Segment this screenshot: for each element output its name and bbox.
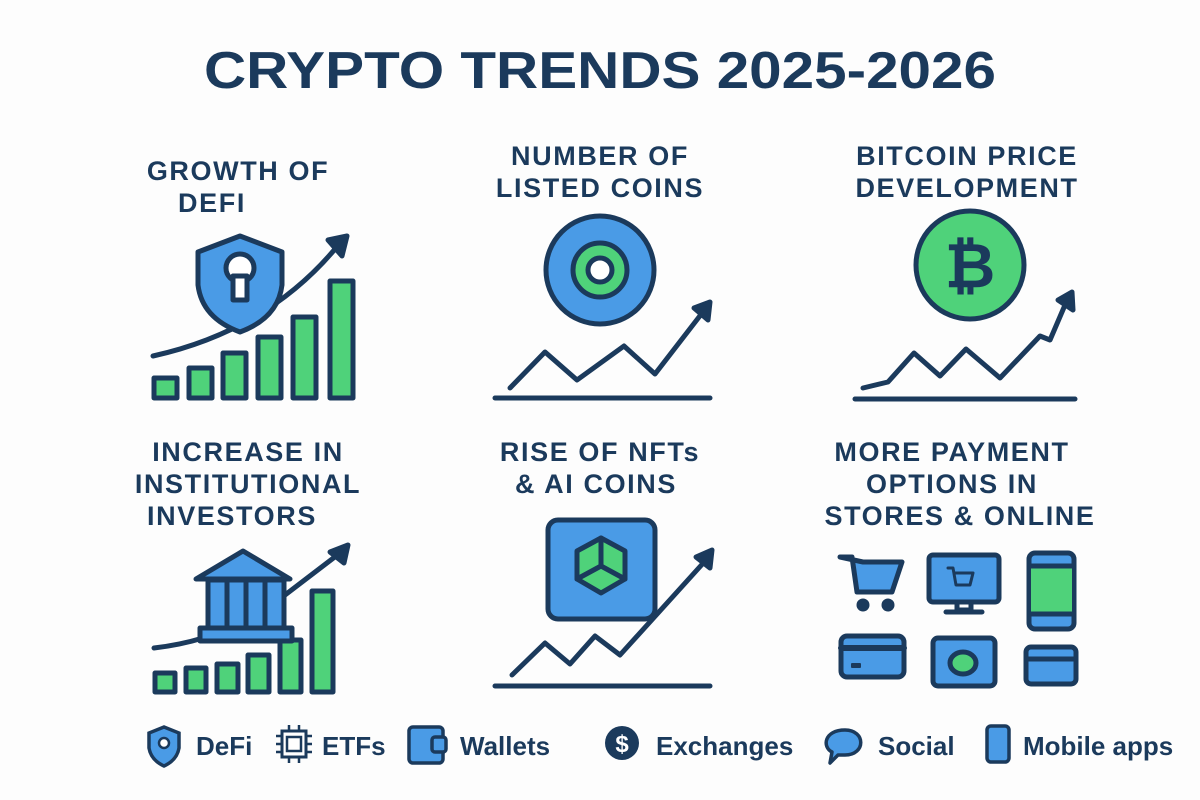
icon: monitor — [929, 555, 999, 612]
legend: mobile apps — [987, 726, 1173, 762]
heading: growth of defi: DEFI — [178, 188, 246, 218]
title: CRYPTO TRENDS 2025-2026 — [204, 42, 996, 100]
heading: payments: STORES & ONLINE — [824, 501, 1096, 531]
heading: bitcoin price — [855, 141, 1079, 203]
icon: card — [841, 636, 904, 677]
heading: nfts: RISE OF NFTs — [500, 437, 700, 467]
panel: payment options — [824, 437, 1096, 686]
heading: bitcoin price: DEVELOPMENT — [855, 173, 1079, 203]
legend: etfs: ETFs — [322, 731, 386, 761]
legend: wallets — [409, 727, 550, 763]
arrow: institutional trend — [154, 545, 348, 648]
arrow: defi trend — [153, 236, 347, 356]
legend: social: Social — [878, 731, 955, 761]
legend: defi: DeFi — [196, 731, 252, 761]
icon: bitcoin: ₿ — [945, 232, 995, 301]
legend: mobile apps: Mobile apps — [1023, 731, 1173, 761]
chart: institutional bars — [155, 591, 333, 692]
heading: listed coins: LISTED COINS — [496, 173, 704, 203]
chart: nft line — [495, 550, 712, 686]
heading: payments: OPTIONS IN — [866, 469, 1038, 499]
heading: payments: MORE PAYMENT — [834, 437, 1070, 467]
heading: payments — [824, 437, 1096, 531]
panel: growth of defi — [147, 156, 353, 398]
panel: bitcoin price — [855, 141, 1079, 399]
heading: listed coins — [496, 141, 704, 203]
heading: institutional: INCREASE IN — [152, 437, 344, 467]
legend — [149, 725, 1173, 766]
heading: institutional: INSTITUTIONAL — [135, 469, 361, 499]
heading: listed coins: NUMBER OF — [511, 141, 689, 171]
heading: institutional — [135, 437, 361, 531]
legend: exchanges — [605, 726, 793, 761]
heading: nfts — [500, 437, 700, 499]
legend: exchanges: $ — [615, 731, 629, 758]
icon: cart — [840, 557, 902, 609]
heading: growth of defi: GROWTH OF — [147, 156, 329, 186]
heading: growth of defi — [147, 156, 329, 218]
icon: coin — [546, 216, 654, 324]
heading: bitcoin price: BITCOIN PRICE — [856, 141, 1078, 171]
heading: nfts: & AI COINS — [515, 469, 677, 499]
chart: bitcoin line — [855, 292, 1075, 399]
icon: small card — [1026, 647, 1076, 684]
panel: listed coins — [495, 141, 710, 398]
chart: defi bars — [154, 281, 353, 398]
legend: wallets: Wallets — [460, 731, 550, 761]
legend: etfs — [276, 725, 386, 763]
icon: nft cube box — [548, 520, 655, 619]
icon: shield keyhole — [198, 236, 282, 332]
icon: bitcoin — [916, 211, 1024, 319]
heading: institutional: INVESTORS — [147, 501, 317, 531]
icon: phone — [1029, 553, 1074, 629]
legend: exchanges: Exchanges — [656, 731, 793, 761]
legend: social — [826, 730, 955, 763]
icon: terminal — [933, 638, 995, 686]
legend: defi — [149, 727, 252, 766]
panel: institutional investors — [135, 437, 361, 692]
icon: bank — [196, 551, 292, 641]
chart: coins line — [495, 302, 710, 398]
panel: nfts & ai coins — [495, 437, 712, 686]
